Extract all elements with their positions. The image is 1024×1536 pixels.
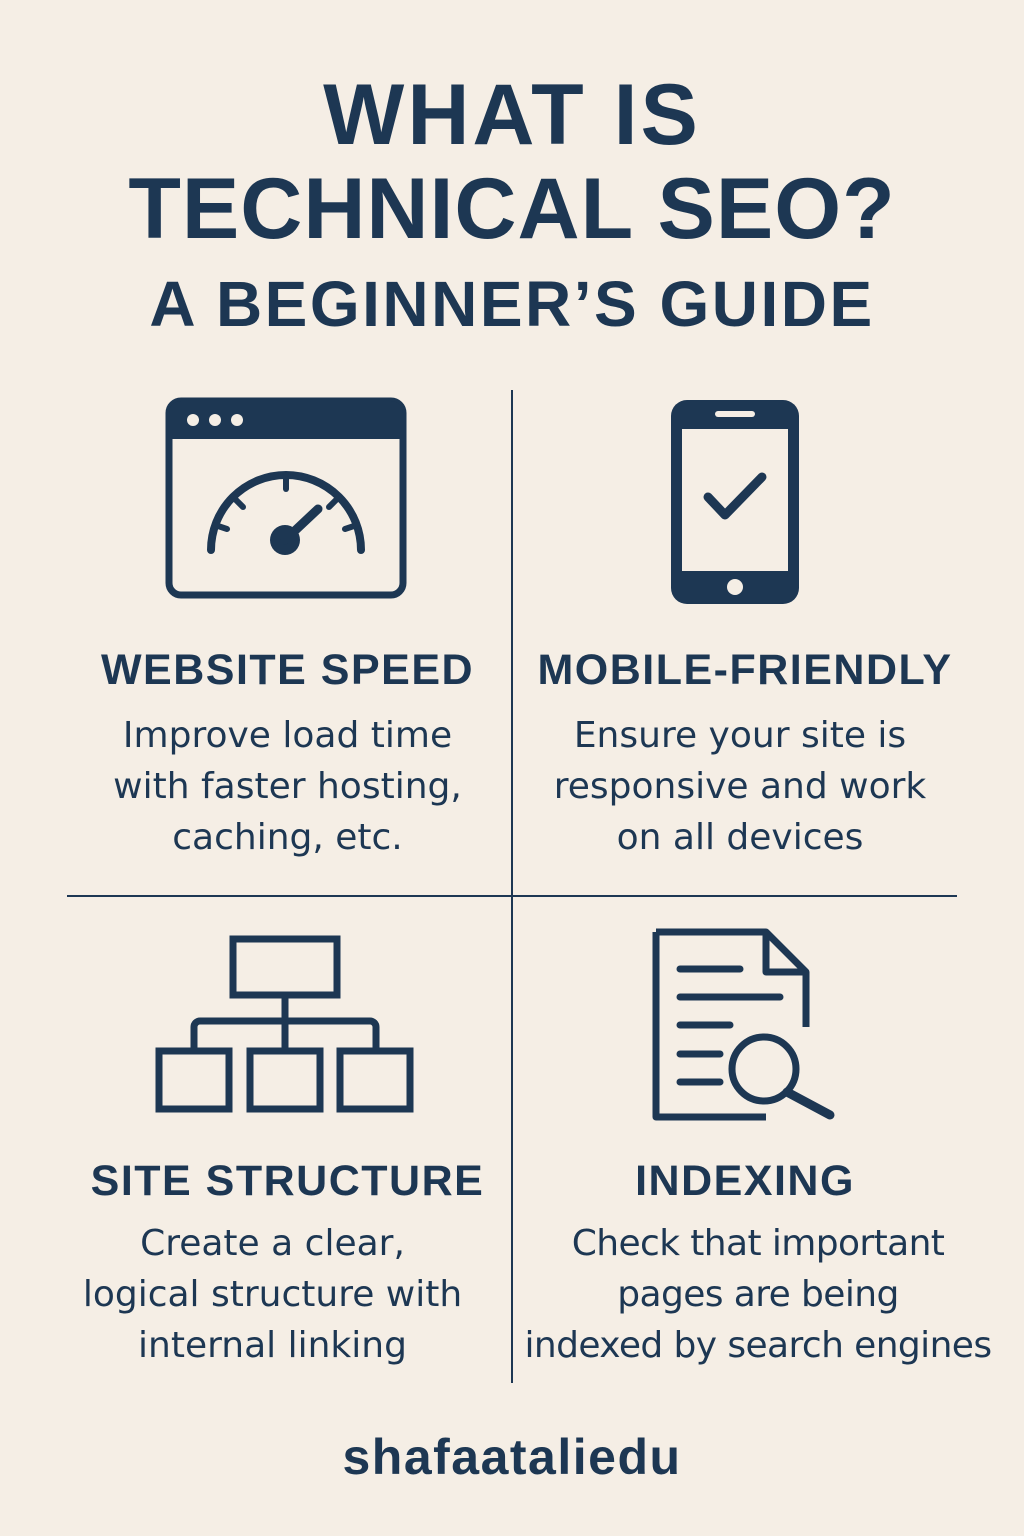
text [524,1223,992,1366]
text: internal linking [138,1325,407,1366]
text: Create a clear, [140,1223,405,1264]
title: WHAT IS [323,67,701,163]
heading: MOBILE-FRIENDLY [537,646,953,694]
icon: document search [652,928,834,1120]
text: on all devices [617,817,863,858]
title [128,67,896,340]
text [554,715,926,858]
title: TECHNICAL SEO? [128,161,896,257]
text [113,715,462,858]
icon: sitemap [156,936,414,1112]
footer: shafaataliedu [342,1429,682,1485]
text: responsive and work [554,766,926,807]
panel: website speed [101,398,474,858]
heading: INDEXING [635,1157,855,1205]
heading: SITE STRUCTURE [91,1157,484,1205]
panel: mobile-friendly [537,400,953,858]
text: Ensure your site is [574,715,906,756]
text: with faster hosting, [113,766,462,807]
heading: WEBSITE SPEED [101,646,474,694]
icon: browser speedometer [166,398,406,598]
text: Check that important [572,1223,944,1264]
text [83,1223,462,1366]
text: indexed by search engines [524,1325,992,1366]
panel: site structure [83,936,484,1366]
title: A BEGINNER’S GUIDE [149,268,875,340]
panel: indexing [524,928,992,1366]
icon: phone check [671,400,799,604]
text: Improve load time [123,715,452,756]
text: caching, etc. [172,817,403,858]
text: pages are being [617,1274,899,1315]
text: logical structure with [83,1274,462,1315]
